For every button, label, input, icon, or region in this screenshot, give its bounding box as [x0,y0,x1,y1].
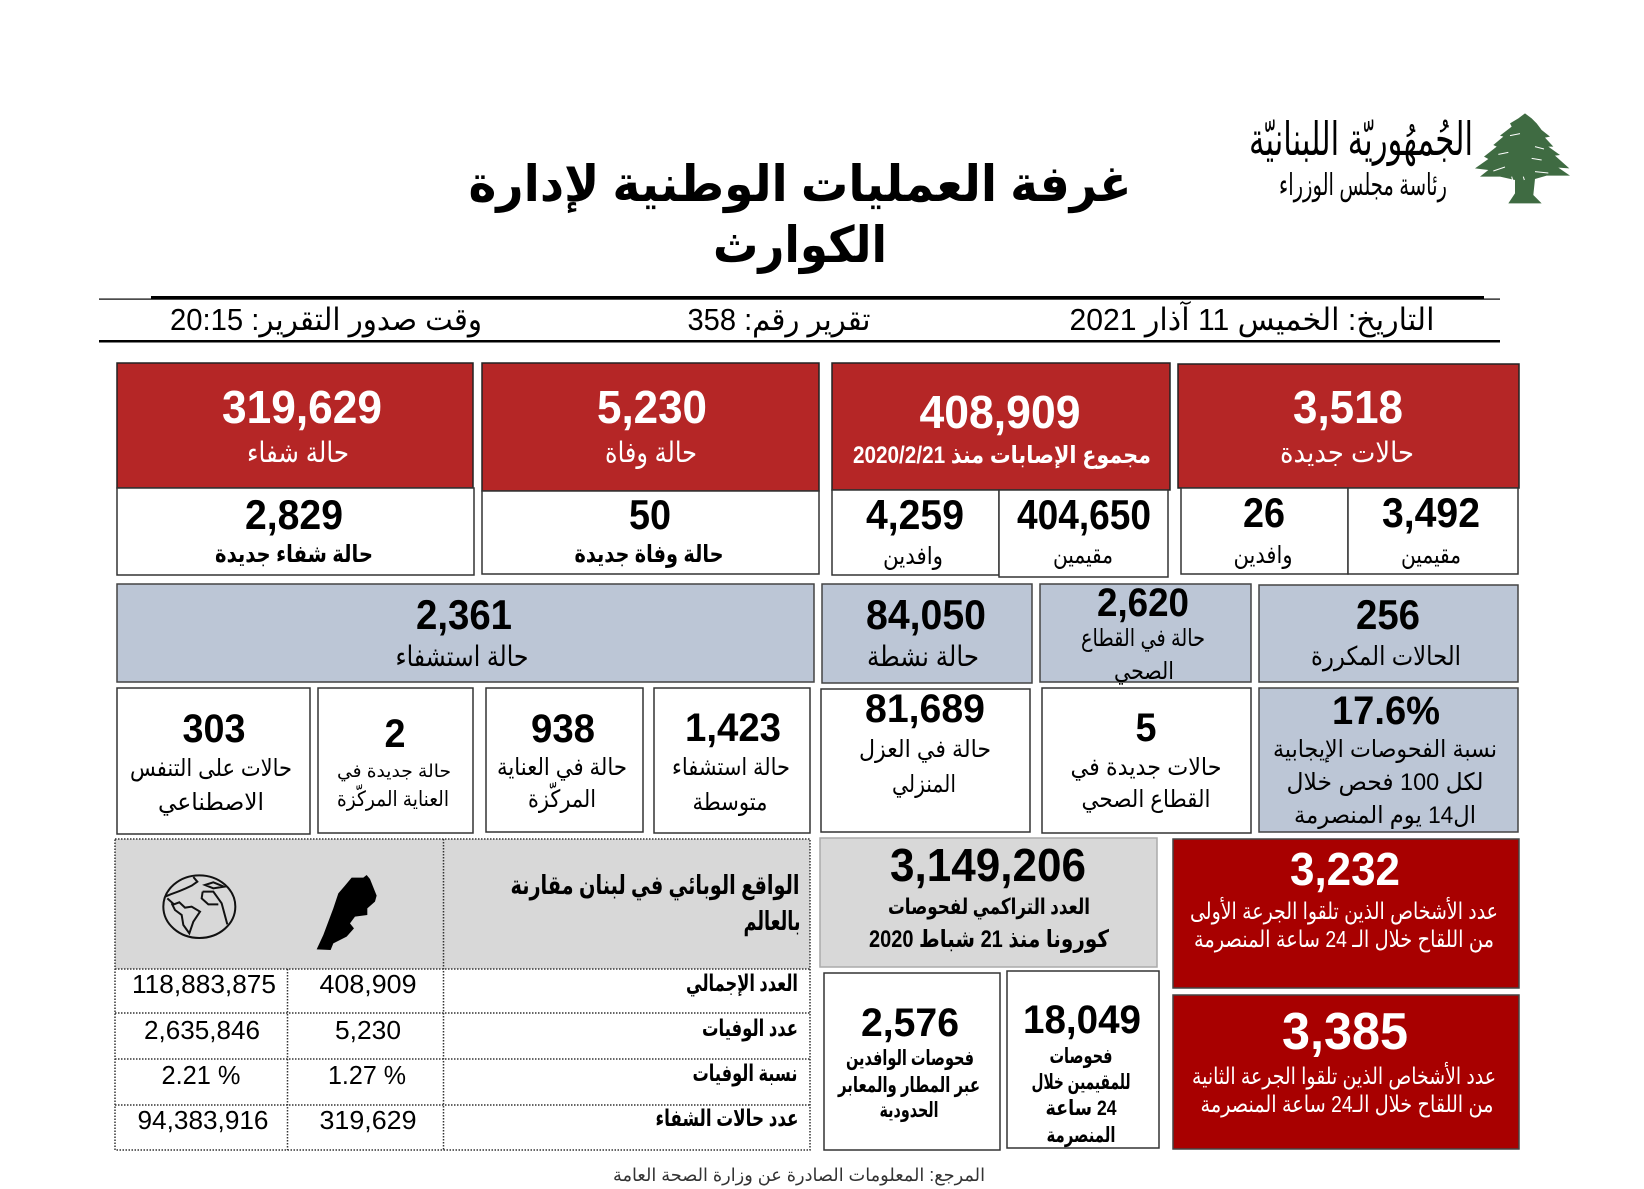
panel: health sector: 2,620 [1097,581,1189,625]
panel: total cases: 404,650 [1017,491,1151,538]
panel: new health sector: 5 [1136,706,1156,750]
panel: deaths [482,363,819,574]
report info row: التاريخ: الخميس 11 آذار 2021 [1070,300,1434,338]
panel: first dose vaccinations: 3,232 [1290,843,1400,895]
row: total cases: العدد الإجمالي [686,970,798,997]
row: deaths: 5,230 [335,1015,401,1045]
panel: deaths: 50 [629,491,671,538]
row: total cases: 408,909 [320,969,416,999]
panel: total cases: 4,259 [866,491,964,538]
panel: cumulative tests: كورونا منذ 21 شباط 2020 [869,926,1109,953]
logo: Lebanese cedar tree [1475,113,1570,203]
panel: new ICU: 2 [384,712,406,756]
panel: arrivals tests: فحوصات الوافدين [846,1047,974,1070]
panel: new health sector: القطاع الصحي [1082,786,1210,813]
panel: comparison table Lebanon vs world [115,839,810,1150]
panel: total cases [832,363,1170,577]
source footnote: المرجع: المعلومات الصادرة عن وزارة الصحة العامة [613,1165,985,1186]
panel: new health sector: حالات جديدة في [1070,754,1222,781]
panel: ventilated: حالات على التنفس [130,755,292,782]
panel: residents tests: المنصرمة [1046,1124,1116,1147]
panel: new ICU: حالة جديدة في [337,761,451,782]
panel: ICU [486,688,643,832]
panel: deaths: حالة وفاة جديدة [574,541,724,568]
panel: active: 84,050 [866,591,986,638]
panel: positivity rate: لكل 100 فحص خلال [1286,769,1484,796]
panel: new cases: 3,518 [1293,381,1403,433]
panel: recoveries: حالة شفاء جديدة [215,541,373,568]
panel: total cases: مجموع الإصابات منذ 2020/2/21 [853,442,1151,469]
title: غرفة العمليات الوطنية لإدارة [468,156,1132,214]
panel: hospitalised: حالة استشفاء [396,641,528,672]
panel: deaths: حالة وفاة [605,437,697,469]
panel: ICU: حالة في العناية [497,754,627,781]
panel: moderate hospital cases: 1,423 [685,706,781,750]
panel: arrivals tests: 2,576 [861,1001,959,1045]
row: recoveries: 94,383,916 [138,1105,268,1135]
table heading [510,870,800,936]
panel: home isolation: حالة في العزل [859,736,991,763]
row: death rate: 2.21 % [162,1060,240,1090]
panel: new cases: وافدين [1234,542,1292,569]
icon: globe [163,875,235,938]
panel: first dose vaccinations [1173,839,1519,988]
panel: moderate hospital cases: حالة استشفاء [672,754,790,781]
panel: hospitalised [117,584,814,682]
table heading: بالعالم [744,906,800,936]
panel: second dose vaccinations: عدد الأشخاص الذين تلقوا الجرعة الثانية [1192,1062,1496,1090]
panel: first dose vaccinations: من اللقاح خلال الـ 24 ساعة المنصرمة [1194,926,1494,953]
panel: new ICU: العناية المركّزة [337,783,449,811]
report info row: تقرير رقم: 358 [688,302,870,338]
row: recoveries [138,1105,798,1135]
panel: first dose vaccinations: عدد الأشخاص الذين تلقوا الجرعة الأولى [1190,897,1498,925]
icon: Lebanon map [317,875,377,950]
header rules [99,296,1500,342]
row: total cases [132,969,798,999]
report info row [170,300,1434,338]
panel: residents tests: للمقيمين خلال [1032,1071,1130,1094]
title [468,156,1132,275]
row: deaths: عدد الوفيات [702,1015,798,1042]
panel: deaths: 5,230 [597,381,707,433]
panel: hospitalised: 2,361 [416,591,512,638]
panel: arrivals tests [824,973,1000,1150]
panel: ventilated: 303 [182,707,246,751]
row: recoveries: 319,629 [320,1105,416,1135]
row: death rate [162,1060,798,1090]
panel: new cases: حالات جديدة [1280,437,1414,468]
panel: recoveries: 319,629 [222,381,382,433]
panel: ICU: المركّزة [528,782,596,813]
row: death rate: نسبة الوفيات [692,1060,798,1087]
panel: recoveries: حالة شفاء [247,437,349,468]
table heading: الواقع الوبائي في لبنان مقارنة [510,870,800,901]
panel: arrivals tests: عبر المطار والمعابر [837,1074,980,1097]
panel: ICU: 938 [531,707,595,751]
panel: total cases: مقيمين [1053,542,1113,569]
panel: new cases: 26 [1243,489,1285,536]
panel: repeated cases [1259,585,1518,682]
panel: residents tests: 18,049 [1023,998,1141,1042]
panel: moderate hospital cases [654,688,810,833]
panel: total cases: وافدين [883,543,943,570]
row: deaths [144,1015,798,1045]
row: recoveries: عدد حالات الشفاء [656,1105,798,1131]
panel: recoveries: 2,829 [245,491,343,538]
panel: health sector: حالة في القطاع [1081,625,1205,652]
panel: repeated cases: الحالات المكررة [1311,641,1461,672]
row: death rate: 1.27 % [328,1060,406,1090]
panel: cumulative tests: العدد التراكمي لفحوصات [888,894,1090,920]
panel: ventilated: الاصطناعي [158,789,264,816]
panel: cumulative tests [820,838,1157,967]
panel: positivity rate: ال14 يوم المنصرمة [1294,802,1476,829]
report info row: وقت صدور التقرير: 20:15 [170,302,482,338]
panel: new health sector [1042,688,1251,833]
panel: arrivals tests: الحدودية [880,1099,938,1122]
panel: active [822,584,1032,683]
panel: residents tests: فحوصات [1050,1045,1112,1068]
panel: new cases [1178,364,1519,574]
panel: home isolation: 81,689 [865,687,985,731]
panel: residents tests: 24 ساعة [1046,1097,1117,1120]
panel: new cases: مقيمين [1401,542,1461,569]
panel: new ICU [318,688,473,833]
panel: cumulative tests: 3,149,206 [890,839,1086,891]
panel: home isolation: المنزلي [892,771,956,798]
panel: repeated cases: 256 [1356,591,1420,638]
panel: ventilated [117,688,310,834]
panel: second dose vaccinations: 3,385 [1282,1003,1408,1061]
panel: health sector: الصحي [1114,658,1174,685]
panel: home isolation [821,687,1030,832]
panel: second dose vaccinations: من اللقاح خلال الـ24 ساعة المنصرمة [1200,1091,1494,1118]
panel: positivity rate [1259,688,1518,832]
panel: total cases: 408,909 [920,386,1080,438]
panel: positivity rate: 17.6% [1332,689,1440,733]
panel: active: حالة نشطة [867,641,979,672]
panel: health sector [1040,581,1251,685]
row: deaths: 2,635,846 [144,1015,260,1045]
title: الكوارث [713,217,887,275]
logo: calligraphic republic heading: الجُمهُوريّة اللبنانيّة [1249,113,1473,167]
logo: calligraphic republic heading [1249,113,1473,202]
panel: recoveries [117,363,474,575]
panel: positivity rate: نسبة الفحوصات الإيجابية [1273,736,1497,763]
row: total cases: 118,883,875 [132,969,276,999]
panel: moderate hospital cases: متوسطة [692,789,768,816]
panel: residents tests [1007,971,1159,1148]
logo: calligraphic republic heading: رئاسة مجلس الوزراء [1279,169,1447,202]
panel: second dose vaccinations [1173,995,1519,1149]
panel: new cases: 3,492 [1382,489,1480,536]
